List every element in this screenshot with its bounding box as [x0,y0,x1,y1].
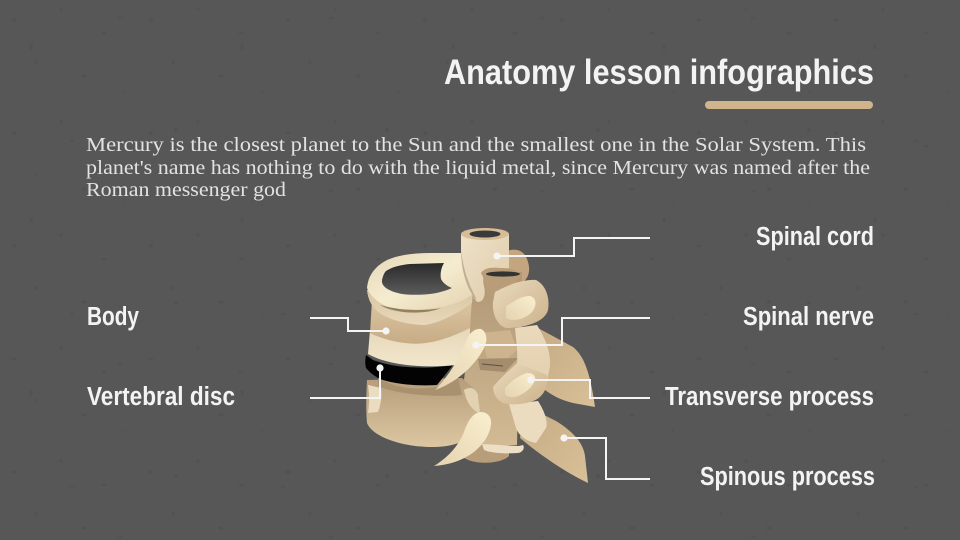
connector: body [310,318,390,335]
connector: spinal nerve [472,318,650,349]
body tan band [370,298,472,344]
label: transverse process: Transverse process [665,383,874,411]
upper fang [435,329,486,390]
right transverse process [538,328,595,407]
transverse process, cream [515,325,550,382]
vertebral lower lip [367,290,473,325]
vertebral disc, black [365,355,453,385]
connector: spinous process [560,434,650,479]
lamina [464,388,480,413]
intro text: Roman messenger god [86,179,286,201]
lower right lobe [493,363,547,404]
label: spinal cord: Spinal cord [756,223,874,251]
label: spinous process: Spinous process [700,463,875,491]
vertebra illustration [365,228,595,483]
spinous process, cream [509,401,547,443]
back lobe behind tube [505,250,529,284]
spinal cord tube [461,234,509,302]
intro text: Mercury is the closest planet to the Sun and the smallest one in the Solar System. This [86,134,866,156]
vertebral top face [367,253,474,310]
nerve opening [481,268,521,296]
connector: spinal cord [493,238,650,260]
lower fang [434,412,491,466]
body lower cream band [368,325,470,366]
label: body: Body [87,303,140,331]
intro text: planet's name has nothing to do with the liquid metal, since Mercury was named after the [86,157,870,179]
label: vertebral disc: Vertebral disc [87,383,235,411]
vertebral hole [382,263,452,295]
base cylinder [461,440,509,463]
label: spinal nerve: Spinal nerve [743,303,874,331]
central column [464,272,522,445]
lower body [366,378,478,447]
connector: transverse process [527,376,650,398]
connector: vertebral disc [310,364,384,398]
spinous process, tan [520,405,588,483]
title: Anatomy lesson infographics [444,53,874,92]
upper right lobe [493,280,548,328]
title accent bar [705,101,873,109]
intro text [86,134,870,201]
